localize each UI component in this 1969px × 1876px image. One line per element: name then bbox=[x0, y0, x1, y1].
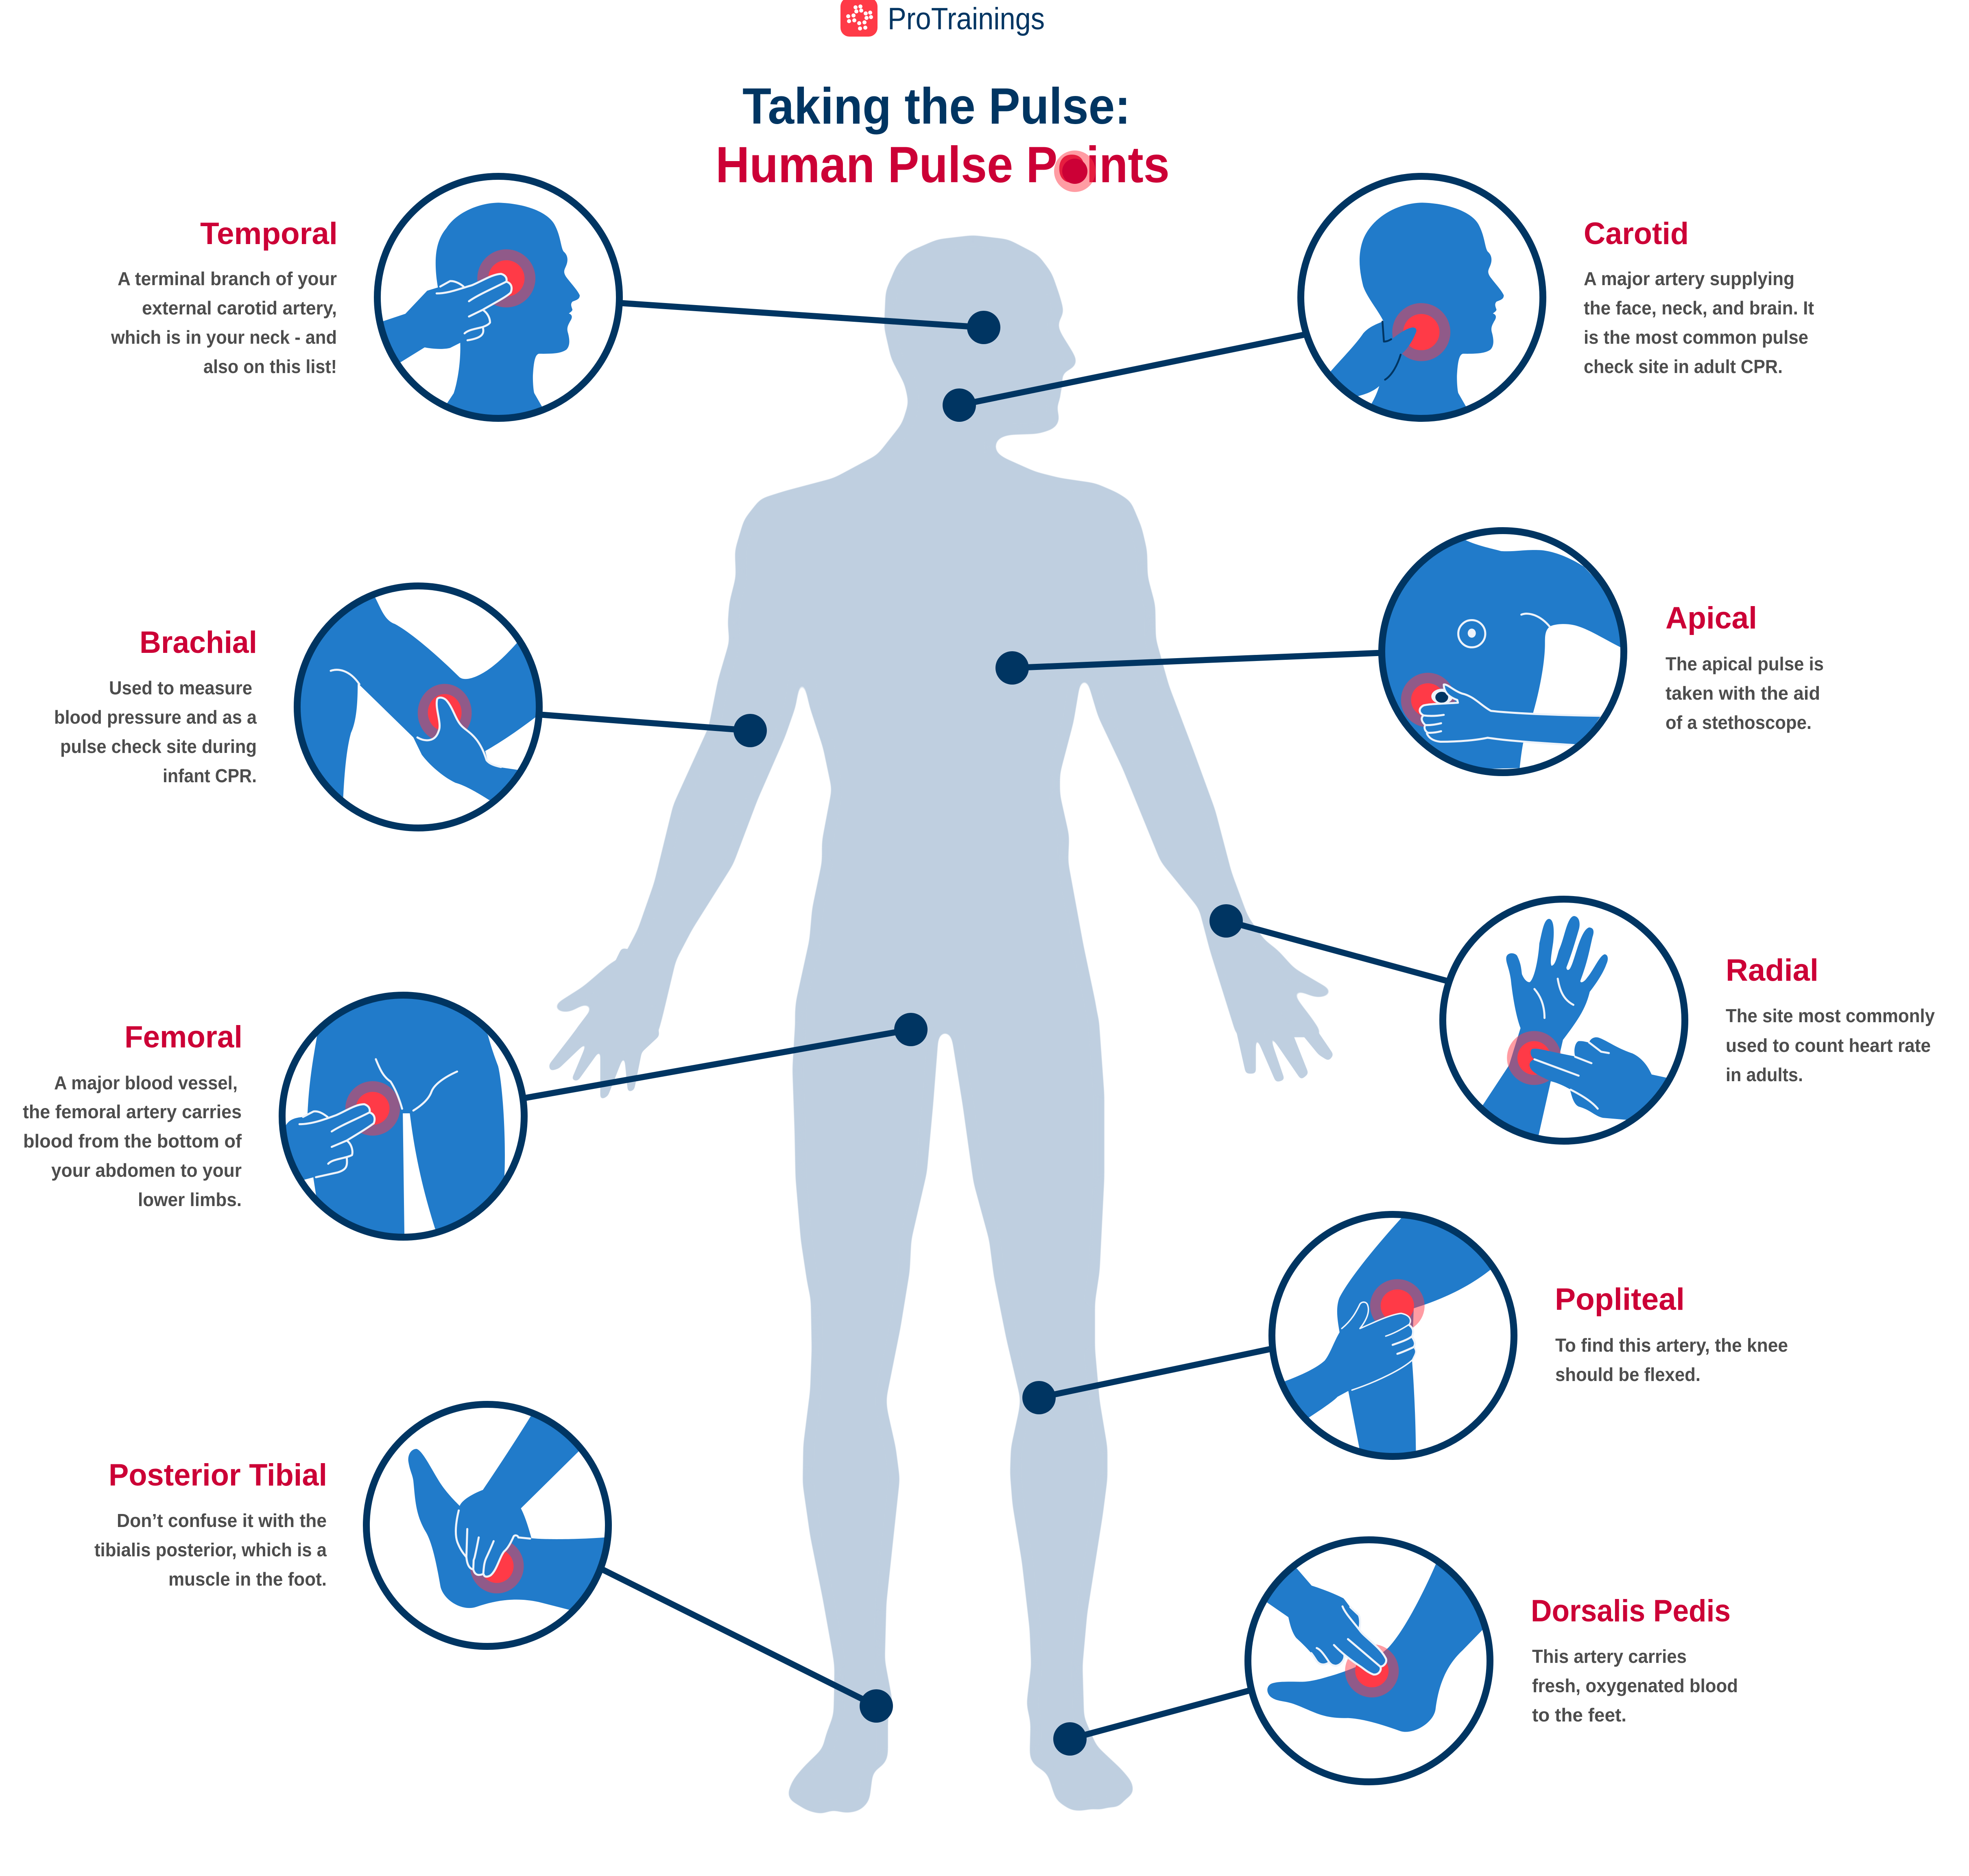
connector: apical bbox=[995, 651, 1381, 685]
illustration: temporal pulse bbox=[377, 176, 620, 421]
illustration: brachial pulse bbox=[277, 586, 547, 828]
text: posterior tibial description: tibialis posterior, which is a bbox=[94, 1539, 327, 1560]
text: radial description bbox=[1726, 1005, 1935, 1085]
text: temporal description bbox=[111, 268, 337, 377]
text: carotid description: A major artery supplying bbox=[1584, 268, 1794, 289]
panel: temporal bbox=[111, 176, 620, 421]
heading: Popliteal: Popliteal bbox=[1555, 1282, 1685, 1317]
text: femoral description: blood from the bottom of bbox=[23, 1130, 242, 1152]
text: femoral description: A major blood vessel, bbox=[54, 1072, 238, 1093]
text: dorsalis pedis description: to the feet. bbox=[1532, 1704, 1626, 1725]
connector: posterior tibial bbox=[602, 1569, 893, 1723]
text: carotid description: the face, neck, and brain. It bbox=[1584, 297, 1814, 318]
text: dorsalis pedis description: fresh, oxygenated blood bbox=[1532, 1675, 1738, 1696]
title bbox=[716, 78, 1170, 193]
logo wordmark: ProTrainings bbox=[888, 2, 1045, 36]
connector: popliteal bbox=[1022, 1349, 1271, 1414]
connector: radial bbox=[1209, 904, 1446, 981]
text: brachial description: blood pressure and as a bbox=[54, 707, 257, 728]
text: femoral description bbox=[23, 1072, 242, 1210]
heading: Radial: Radial bbox=[1726, 953, 1818, 988]
panel: apical bbox=[1373, 530, 1824, 773]
heading: Brachial: Brachial bbox=[140, 625, 257, 660]
text: posterior tibial description bbox=[94, 1510, 327, 1590]
text: femoral description: the femoral artery carries bbox=[23, 1101, 242, 1122]
panel: brachial bbox=[54, 586, 547, 828]
text: posterior tibial description: muscle in the foot. bbox=[168, 1568, 327, 1590]
panel: popliteal bbox=[1272, 1209, 1788, 1462]
panel: posterior tibial bbox=[94, 1404, 620, 1647]
connector: temporal bbox=[620, 303, 1000, 344]
illustration: femoral pulse bbox=[282, 984, 524, 1257]
text: carotid description: is the most common pulse bbox=[1584, 327, 1808, 348]
text: dorsalis pedis description: This artery carries bbox=[1532, 1646, 1687, 1667]
illustration: radial pulse bbox=[1443, 899, 1688, 1141]
text: popliteal description bbox=[1555, 1335, 1788, 1385]
illustration: popliteal pulse bbox=[1272, 1209, 1515, 1462]
text: apical description: taken with the aid bbox=[1666, 683, 1820, 704]
text: radial description: in adults. bbox=[1726, 1064, 1803, 1085]
text: carotid description bbox=[1584, 268, 1814, 377]
icon: pulse dot in title bbox=[1054, 151, 1096, 192]
text: femoral description: lower limbs. bbox=[138, 1189, 242, 1210]
text: dorsalis pedis description bbox=[1532, 1646, 1738, 1725]
text: temporal description: external carotid artery, bbox=[142, 297, 337, 318]
title line 2: Human Pulse Points bbox=[716, 137, 1170, 193]
connector: dorsalis pedis bbox=[1053, 1690, 1251, 1756]
heading: Dorsalis Pedis: Dorsalis Pedis bbox=[1531, 1594, 1731, 1628]
text: radial description: The site most commonly bbox=[1726, 1005, 1935, 1026]
panel: femoral bbox=[23, 984, 524, 1257]
heading: Apical: Apical bbox=[1666, 601, 1757, 635]
connector: brachial bbox=[541, 714, 767, 747]
text: femoral description: your abdomen to your bbox=[51, 1160, 242, 1181]
connector: femoral bbox=[526, 1013, 928, 1098]
logo: ProTrainings bbox=[840, 0, 1045, 37]
heading: Temporal: Temporal bbox=[200, 216, 338, 251]
illustration: carotid pulse bbox=[1301, 176, 1543, 421]
icon: logo mark bbox=[840, 0, 878, 37]
text: apical description: The apical pulse is bbox=[1666, 653, 1824, 674]
text: brachial description: pulse check site during bbox=[60, 736, 257, 757]
connector: carotid bbox=[943, 334, 1306, 422]
text: radial description: used to count heart rate bbox=[1726, 1035, 1931, 1056]
illustration: apical pulse bbox=[1373, 530, 1624, 773]
panel: dorsalis pedis bbox=[1248, 1540, 1738, 1782]
text: brachial description: Used to measure bbox=[109, 677, 252, 698]
illustration: dorsalis pedis pulse bbox=[1248, 1540, 1499, 1782]
title line 1: Taking the Pulse: bbox=[742, 78, 1131, 135]
heading: Carotid: Carotid bbox=[1584, 216, 1689, 251]
panel: carotid bbox=[1301, 176, 1814, 421]
heading: Femoral: Femoral bbox=[124, 1020, 242, 1054]
text: popliteal description: To find this artery, the knee bbox=[1555, 1335, 1788, 1356]
text: apical description: of a stethoscope. bbox=[1666, 712, 1812, 733]
text: temporal description: A terminal branch of your bbox=[118, 268, 337, 289]
text: brachial description: infant CPR. bbox=[163, 765, 257, 786]
text: posterior tibial description: Don’t confuse it with the bbox=[117, 1510, 327, 1531]
text: apical description bbox=[1666, 653, 1824, 733]
text: popliteal description: should be flexed. bbox=[1555, 1364, 1700, 1385]
panel: radial bbox=[1443, 899, 1935, 1141]
text: temporal description: which is in your neck - and bbox=[111, 327, 337, 348]
heading: Posterior Tibial: Posterior Tibial bbox=[109, 1458, 327, 1492]
text: brachial description bbox=[54, 677, 257, 786]
illustration: posterior tibial pulse bbox=[366, 1404, 620, 1647]
text: carotid description: check site in adult CPR. bbox=[1584, 356, 1783, 377]
text: temporal description: also on this list! bbox=[203, 356, 337, 377]
human body silhouette bbox=[549, 235, 1334, 1814]
